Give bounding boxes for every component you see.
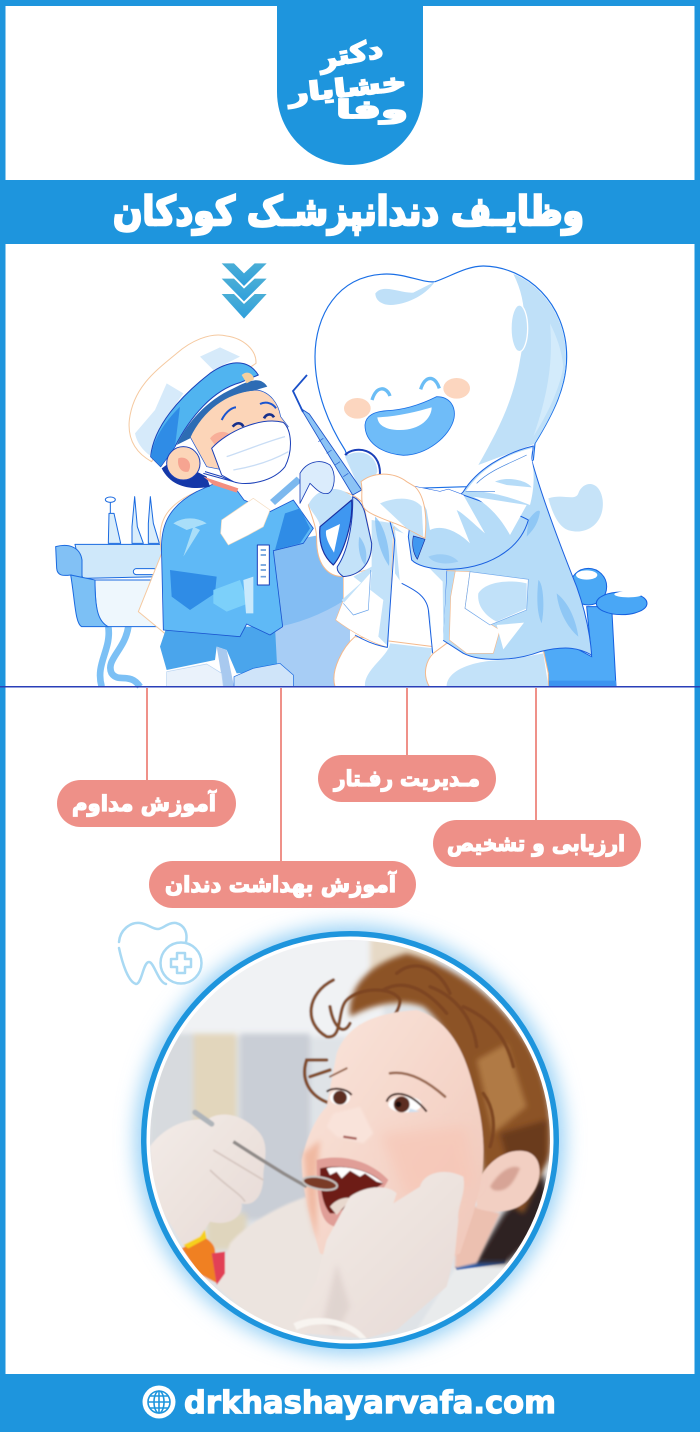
label: continuous education: آموزش مداوم: [72, 789, 216, 817]
kid shoes: [167, 664, 223, 687]
logo badge: [277, 0, 423, 165]
dentist left glove: [150, 1115, 266, 1245]
kid character: [129, 335, 313, 687]
kid hand on tool: [300, 462, 334, 503]
kid trousers: [160, 627, 277, 673]
label: assessment and diagnosis: ارزیابی و تشخیص: [447, 832, 625, 857]
neck: [455, 1207, 500, 1268]
connector lines: [147, 688, 536, 862]
title text: وظایـف دندانپزشـک کودکان: [113, 189, 584, 235]
tooth cheeks: [344, 378, 470, 419]
floor line: [0, 686, 700, 688]
coat left panel: [336, 527, 394, 647]
eyes: [327, 1089, 427, 1112]
label: dental hygiene education: [149, 861, 416, 908]
logo text: خشایار: [285, 67, 408, 109]
mouth: [317, 1157, 388, 1227]
title band: [0, 180, 700, 244]
website address: drkhashayarvafa.com: [184, 1385, 556, 1421]
photo: child at dentist: [130, 920, 570, 1360]
heart shape behind tooth: [548, 484, 603, 532]
tooth lab coat and arms: [300, 408, 592, 687]
tooth left sleeve: [308, 450, 380, 577]
sweater: [218, 1196, 322, 1334]
dental chair: [542, 568, 647, 687]
label: assessment and diagnosis: [433, 820, 641, 867]
mirror tool: [195, 1112, 212, 1124]
kid cap: [129, 335, 256, 462]
tooth legs: [334, 637, 548, 687]
photo inner ring: [148, 938, 552, 1342]
icon: globe: [142, 1386, 176, 1418]
photo glow: [136, 926, 564, 1354]
tooth mouth: [365, 397, 454, 455]
coat pocket: [465, 572, 528, 625]
kid ear: [167, 447, 200, 480]
kid neck shadow and hair back: [162, 460, 210, 488]
coat lower white panel: [446, 571, 500, 653]
kid face: [190, 390, 288, 473]
ear: [477, 1151, 540, 1212]
nose: [329, 1108, 372, 1142]
photo content: [150, 940, 550, 1340]
icon: tooth with plus: [119, 923, 202, 984]
label: behaviour management: [318, 755, 496, 802]
label: continuous education: [57, 780, 236, 827]
sink and instruments: [56, 497, 163, 687]
icon: triple chevron arrow down: [222, 263, 267, 319]
hair: [473, 1173, 553, 1263]
background shape behind characters: [262, 530, 350, 687]
kid gloves: [221, 498, 270, 545]
tooth eyes: [372, 378, 439, 400]
logo text: [285, 34, 408, 125]
logo text: وفا: [336, 95, 408, 125]
eyebrows: [330, 1068, 445, 1097]
tooth arm: [408, 487, 528, 569]
coat collar highlight: [466, 448, 534, 505]
footer band: [0, 1374, 700, 1432]
kid white coat back: [138, 492, 200, 637]
kid badge: [257, 545, 269, 585]
face: [302, 1010, 483, 1273]
tooth head: [315, 266, 567, 490]
instrument hook: [293, 375, 307, 412]
label: dental hygiene education: آموزش بهداشت دندان: [165, 870, 396, 898]
dental tool: [301, 408, 362, 495]
logo text: دکتر: [315, 34, 385, 75]
dentist right glove: [293, 1172, 464, 1338]
kid mask: [212, 421, 290, 484]
kid coat: [161, 484, 313, 637]
label: behaviour management: مـدیریت رفـتار: [333, 767, 480, 792]
curls: [305, 966, 513, 1147]
toy: [182, 1237, 217, 1283]
tooth body: [315, 266, 567, 490]
tooth hand: [361, 474, 426, 538]
illustration: dentist kid and tooth: [0, 266, 700, 688]
coat central column: [393, 525, 447, 653]
tooth coat body: [427, 446, 592, 659]
tooth shading: [478, 274, 566, 465]
